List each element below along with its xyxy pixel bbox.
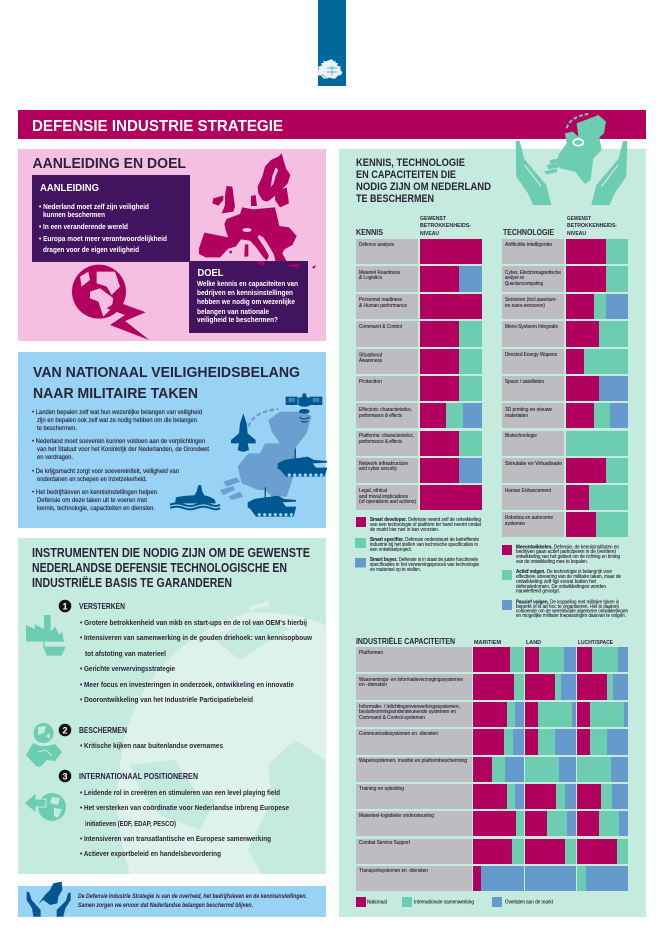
panel: instrumenten	[18, 538, 326, 874]
legend: kennis: Smart developer. Defensie neemt zelf de ontwikkeling	[370, 517, 481, 523]
box: doel	[189, 261, 316, 333]
legend: kennis: een ontwikkelproject.	[370, 547, 412, 553]
icon: number 1: 1	[62, 601, 68, 611]
row: Network infrastructure: Network infrastructure	[359, 461, 408, 467]
icon: globe with arrow	[24, 793, 66, 821]
row: Materieel-logistieke ondersteuning: Materieel-logistieke ondersteuning	[359, 813, 434, 819]
box: doel: Welke kennis en capaciteiten van	[197, 281, 298, 288]
legend: technologie: en mogelijke militaire toepassingen daarvan te volgen.	[516, 613, 626, 619]
text block: bullets militaire taken: van het Statuut voor het Koninkrijk der Nederlanden, de Grondwet	[37, 446, 209, 453]
row: Space / satellieten: Space / satellieten	[505, 379, 544, 385]
chart: industriële capaciteiten: INDUSTRIËLE CAPACITEITEN	[356, 636, 455, 646]
legend: kennis: de markt hier niet in kan voorzien.	[370, 527, 439, 533]
icon: factory and ship	[26, 615, 66, 656]
section 3: internationaal positioneren	[24, 770, 289, 858]
row: 3D printing: materialen	[505, 413, 528, 419]
row: 3D printing	[502, 403, 628, 428]
legend: technologie	[502, 544, 628, 619]
row: Biotechnologie: Biotechnologie	[505, 433, 537, 439]
row: Command & Control: Command & Control	[359, 324, 402, 330]
heading: kennis, technologie: NODIG ZIJN OM NEDERLAND	[356, 181, 491, 193]
icon: submarine	[170, 485, 220, 509]
icon: globe and handshake	[26, 723, 62, 767]
box: doel: veiligheid te beschermen?	[197, 317, 278, 324]
background: faint globe	[118, 601, 326, 874]
heading: kennis, technologie: TE BESCHERMEN	[356, 193, 434, 205]
section 1: versterken: • Gerichte verwervingsstrategie	[80, 666, 175, 673]
icon: hands holding the Netherlands	[27, 882, 71, 917]
row: Situational Awareness: Situational	[359, 352, 382, 358]
section 1: versterken: • Intensiveren van samenwerking in de gouden driehoek: van kennisopbouw	[80, 635, 312, 642]
box: aanleiding: • In een veranderende wereld	[39, 224, 128, 231]
text block: bullets militaire taken: en verdragen.	[37, 454, 73, 461]
text: footer statement	[78, 893, 307, 909]
chart: industriële capaciteiten: LAND	[526, 640, 541, 646]
chart: kennis: NIVEAU	[420, 231, 439, 237]
title bar: DEFENSIE INDUSTRIE STRATEGIE	[32, 118, 283, 135]
row: Waarnemings- en informatieverzorgingssystemen: Waarnemings- en informatieverzorgingssystemen	[359, 677, 463, 683]
legend: technologie: effectieve uitvoering van de militaire taken, maar de	[516, 574, 621, 580]
text block: bullets militaire taken	[32, 409, 209, 512]
row: Personnel readiness: & Human performance	[359, 303, 407, 309]
row: Materiel Readiness: Materiel Readiness	[359, 270, 400, 276]
row: Combat Service Support: Combat Service Support	[359, 840, 410, 846]
row: Training en opleiding: Training en opleiding	[359, 786, 404, 792]
row: Defence analysis	[356, 239, 482, 264]
row: Human Enhancement	[502, 485, 628, 510]
chart: kennis: KENNIS	[356, 227, 383, 237]
legend: technologie: ontwikkeling van het gebied om de richting en timing	[516, 554, 620, 560]
row: Transportsystemen en -diensten: Transportsystemen en -diensten	[359, 868, 428, 874]
text: footer statement: Samen zorgen we ervoor dat Nederlandse belangen beschermd blijven.	[78, 902, 253, 909]
row: Network infrastructure: and cyber security	[359, 466, 397, 472]
panel: footer statement	[18, 882, 326, 917]
icon: globe with lightning	[72, 265, 149, 340]
legend: industriële capaciteiten	[356, 897, 553, 907]
row: Wapensystemen: Wapensystemen, munitie en platformbescherming	[359, 758, 467, 764]
row: Situational Awareness	[356, 349, 482, 374]
row: Effectors	[356, 403, 482, 428]
row: Cyber: analyse en	[505, 275, 524, 281]
row: Protection: Protection	[359, 379, 382, 385]
row: Cyber: Quantumcomputing	[505, 281, 543, 287]
heading: nationaal veiligheidsbelang: VAN NATIONAAL VEILIGHEIDSBELANG	[33, 365, 300, 381]
row: Materieel-logistieke ondersteuning	[356, 811, 628, 836]
icon: hands holding the Netherlands	[516, 114, 627, 205]
panel: kennis, technologie en capaciteiten	[339, 114, 646, 917]
legend: kennis: van een technologie of platform ter hand neemt omdat	[370, 522, 481, 528]
box: aanleiding: kunnen beschermen	[43, 212, 105, 219]
icon: number 2	[59, 724, 71, 736]
legend: technologie: van de ontwikkeling mee te bepalen.	[516, 559, 588, 565]
legend: kennis: industrie bij het stellen van technische specificaties in	[370, 542, 478, 548]
row: Materiel Readiness	[356, 266, 482, 292]
row: Human Enhancement: Human Enhancement	[505, 488, 551, 494]
legend: kennis: Smart buyer. Defensie is in staat de juiste functionele	[370, 557, 478, 563]
row: Defence analysis: Defence analysis	[359, 242, 394, 248]
box: doel: bedrijven en kennisinstellingen	[197, 290, 293, 297]
row: Effectors: performance & effects	[359, 413, 402, 419]
chart: technologie	[502, 216, 628, 537]
chart: industriële capaciteiten	[356, 636, 628, 891]
row: Network infrastructure	[356, 458, 482, 483]
row: Personnel readiness: Personnel readiness	[359, 297, 402, 303]
legend: kennis	[355, 517, 481, 573]
section 3: internationaal positioneren: • Intensiveren van transatlantische en Europese samenwerking	[80, 836, 271, 843]
legend: technologie: bedrijven gaan actief participeren in de (verdere)	[516, 549, 616, 555]
text: footer statement: De Defensie Industrie Strategie is van de overheid, het bedrijfsleven en de kennisinstellingen.	[78, 893, 307, 900]
legend: technologie: ontwikkeling zelf ligt vooral buiten het	[516, 579, 596, 585]
section 1: versterken	[26, 600, 312, 704]
row: Waarnemings- en informatieverzorgingssystemen	[356, 674, 628, 700]
row: Simulatie en Virtualisatie: Simulatie en Virtualisatie	[505, 461, 562, 467]
text block: bullets militaire taken: te beschermen.	[37, 425, 77, 432]
box: aanleiding: dragen voor de eigen veiligheid	[43, 247, 139, 254]
chart: kennis	[356, 216, 482, 510]
chart: kennis: BETROKKENHEIDS-	[420, 223, 471, 229]
row: Cyber: Cyber, Electromagnetische	[505, 270, 561, 276]
chart: technologie: TECHNOLOGIE	[503, 227, 554, 237]
chart: technologie: NIVEAU	[567, 231, 586, 237]
legend: industriële capaciteiten: Internationale samenwerking	[414, 900, 474, 906]
chart: technologie: GEWENST	[567, 216, 591, 222]
legend: technologie: Actief volgen. De technologie is belangrijk voor	[516, 569, 612, 575]
legend: technologie: voldoende om de wereldwijde algemene ontwikkelingen	[516, 608, 628, 614]
heading: aanleiding en doel: AANLEIDING EN DOEL	[32, 156, 186, 172]
row: 3D printing: 3D printing en nieuwe	[505, 407, 552, 413]
icon: number 1	[59, 600, 71, 612]
row: Informatie- / inlichtingenverwerkingssystemen	[356, 702, 628, 727]
box: aanleiding	[32, 175, 190, 262]
heading: kennis, technologie: EN CAPACITEITEN DIE	[356, 169, 456, 181]
row: Directed Energy Wapens: Directed Energy Wapens	[505, 352, 557, 358]
heading: instrumenten	[32, 546, 310, 590]
legend: technologie: Meeontwikkelen. Defensie, de kennisinstituten en	[516, 544, 619, 550]
heading: instrumenten: INDUSTRIËLE BASIS TE GARANDEREN	[32, 575, 232, 590]
section 1: versterken: • Meer focus en investeringen in onderzoek, ontwikkeling en innovatie	[80, 682, 294, 689]
section 3: internationaal positioneren: • Actiever exportbeleid en handelsbevordering	[80, 851, 221, 858]
row: Mens-Systeem Integratie: Mens-Systeem Integratie	[505, 324, 558, 330]
row: Robotica	[502, 512, 628, 537]
heading: nationaal veiligheidsbelang: NAAR MILITAIRE TAKEN	[33, 386, 198, 402]
legend: kennis: en materieel op te stellen.	[370, 567, 421, 573]
legend: kennis: Smart specifier. Defensie ondersteunt de betreffende	[370, 537, 479, 543]
heading: kennis, technologie	[356, 157, 491, 205]
text block: bullets militaire taken: • De krijgsmacht zorgt voor soevereiniteit, veiligheid van	[32, 468, 180, 475]
row: Effectors: Effectors: characteristics,	[359, 407, 412, 413]
chart: technologie: BETROKKENHEIDS-	[567, 223, 617, 229]
icon: tank right	[278, 448, 327, 477]
row: Combat Service Support	[356, 839, 628, 864]
row: Robotica: Robotica en autonome	[505, 515, 553, 521]
title bar	[18, 110, 646, 139]
row: Situational Awareness: Awareness	[359, 358, 382, 364]
chart: kennis: GEWENST	[420, 216, 447, 222]
row: Platforms	[356, 431, 482, 456]
row: Informatie- / inlichtingenverwerkingssystemen: Command & Control-systemen	[359, 715, 425, 721]
legend: industriële capaciteiten: Overlaten aan de markt	[505, 900, 553, 906]
legend: kennis: specificaties in het verwervingsproces van technologie	[370, 562, 479, 568]
row: Communicatiesystemen en -diensten: Communicatiesystemen en -diensten	[359, 731, 438, 737]
section 1: versterken: tot afstoting van materieel	[85, 651, 166, 658]
row: Informatie- / inlichtingenverwerkingssystemen: Informatie- / inlichtingenverwerkingssystemen,	[359, 704, 460, 710]
row: Sensoren	[502, 294, 628, 319]
box: aanleiding: AANLEIDING	[40, 182, 99, 194]
logo: Rijksoverheid ribbon with crest	[316, 0, 346, 86]
chart: industriële capaciteiten: MARITIEM	[474, 640, 501, 646]
row: Wapensystemen	[356, 757, 628, 782]
box: aanleiding: • Nederland moet zelf zijn veiligheid	[39, 204, 149, 211]
row: Platforms: performance & effects	[359, 439, 402, 445]
section 2: beschermen: • Kritische kijken naar buitenlandse overnames	[80, 743, 223, 750]
row: Command & Control	[356, 321, 482, 347]
row: Platformen: Platformen	[359, 650, 383, 656]
text block: bullets militaire taken: zijn en bepalen ook zelf wat ze nodig hebben om die belangen	[37, 417, 198, 424]
row: Artificiële intelligentie: Artificiële intelligentie	[505, 242, 552, 248]
row: Training en opleiding	[356, 784, 628, 809]
icon: tank bottom	[248, 487, 296, 517]
panel: van nationaal veiligheidsbelang naar militaire taken	[18, 352, 327, 528]
icon: satellite	[286, 393, 322, 422]
text block: bullets militaire taken: Defensie om deze taken uit te voeren met	[37, 497, 147, 504]
section 3: internationaal positioneren: • Leidende rol in creeëren en stimuleren van een level playing field	[80, 790, 280, 797]
row: Directed Energy Wapens	[502, 349, 628, 374]
row: Informatie- / inlichtingenverwerkingssystemen: besluitvormingsondersteunende systemen en	[359, 709, 456, 715]
box: doel: belangen van nationale	[197, 309, 269, 316]
row: Sensoren: en nano-sensoren)	[505, 303, 545, 309]
heading: instrumenten: NEDERLANDSE DEFENSIE TECHNOLOGISCHE EN	[32, 561, 287, 575]
text block: bullets militaire taken: • Het bedrijfsleven en kennisinstellingen helpen	[32, 489, 158, 496]
text block: bullets militaire taken: • Nederland moet soeverein kunnen voldoen aan de verplichtingen	[32, 438, 206, 445]
legend: technologie: Passief volgen. De koppeling met militaire taken is	[516, 599, 619, 605]
section 3: internationaal positioneren: • Het versterken van coördinatie voor Nederlandse inbreng Europese	[80, 805, 289, 812]
row: Legal, ethical: Legal, ethical	[359, 488, 387, 494]
row: Space / satellieten	[502, 376, 628, 401]
icon: number 3	[59, 770, 71, 782]
text block: bullets militaire taken: • Landen bepalen zelf wat hun wezenlijke belangen van veiligheid	[32, 409, 203, 416]
map: Europe	[199, 153, 297, 265]
row: Legal, ethical	[356, 485, 482, 510]
heading: kennis, technologie: KENNIS, TECHNOLOGIE	[356, 157, 465, 169]
section 1: versterken: VERSTERKEN	[79, 601, 125, 611]
row: Artificiële intelligentie	[502, 239, 628, 264]
section 3: internationaal positioneren: initiatieven (EDF, EDAP, PESCO)	[85, 821, 176, 828]
legend: industriële capaciteiten: Nationaal	[367, 900, 387, 906]
text block: bullets militaire taken: onderdanen en schepen en inzetzekerheid.	[37, 476, 147, 483]
row: Transportsystemen en -diensten	[356, 866, 628, 891]
row: Platforms: Platforms: characteristics,	[359, 433, 414, 439]
icon: number 2: 2	[62, 725, 68, 735]
heading: instrumenten: INSTRUMENTEN DIE NODIG ZIJN OM DE GEWENSTE	[32, 546, 310, 560]
row: Materiel Readiness: & Logistics	[359, 275, 382, 281]
row: Mens-Systeem Integratie	[502, 321, 628, 347]
box: aanleiding: • Europa moet meer verantwoordelijkheid	[39, 236, 167, 243]
legend: technologie: beperkt of is ad hoc te organiseren. Het is daarom	[516, 604, 619, 610]
row: Legal, ethical: (of operations and actions)	[359, 499, 416, 505]
section 2: beschermen: BESCHERMEN	[79, 725, 127, 735]
panel: aanleiding en doel	[18, 149, 326, 341]
row: Waarnemings- en informatieverzorgingssystemen: en -diensten	[359, 682, 387, 688]
map: Netherlands	[220, 409, 312, 500]
row: Communicatiesystemen en -diensten	[356, 729, 628, 755]
section 1: versterken: • Grotere betrokkenheid van mkb en start-ups en de rol van OEM's hierbij	[80, 620, 307, 627]
row: Legal, ethical: and moral implications	[359, 494, 408, 500]
row: Biotechnologie	[502, 431, 628, 456]
row: Platformen	[356, 647, 628, 672]
box: doel: hebben we nodig om wezenlijke	[197, 299, 295, 306]
row: Simulatie en Virtualisatie	[502, 458, 628, 483]
box: doel: DOEL	[198, 267, 224, 279]
illustration: Nederland with military units	[170, 393, 327, 517]
section 3: internationaal positioneren: INTERNATIONAAL POSITIONEREN	[79, 771, 198, 781]
section 1: versterken: • Doorontwikkeling van het Industriële Participatiebeleid	[80, 697, 253, 704]
row: Protection	[356, 376, 482, 401]
legend: technologie: nauwlettend gevolgd.	[516, 588, 560, 594]
row: Sensoren: Sensoren (incl.quantum-	[505, 297, 557, 303]
legend: technologie: defensiedomein. De ontwikkelingen worden	[516, 584, 606, 590]
chart: industriële capaciteiten: LUCHT/SPACE	[578, 640, 613, 646]
text block: bullets militaire taken: kennis, technologie, capaciteiten en diensten.	[37, 505, 155, 512]
heading: nationaal veiligheidsbelang	[33, 365, 300, 402]
icon: fighter jet	[231, 413, 256, 452]
icon: number 3: 3	[62, 771, 68, 781]
row: Cyber	[502, 266, 628, 292]
row: Personnel readiness	[356, 294, 482, 319]
row: Robotica: systemen	[505, 521, 525, 527]
section 2: beschermen	[26, 723, 223, 767]
